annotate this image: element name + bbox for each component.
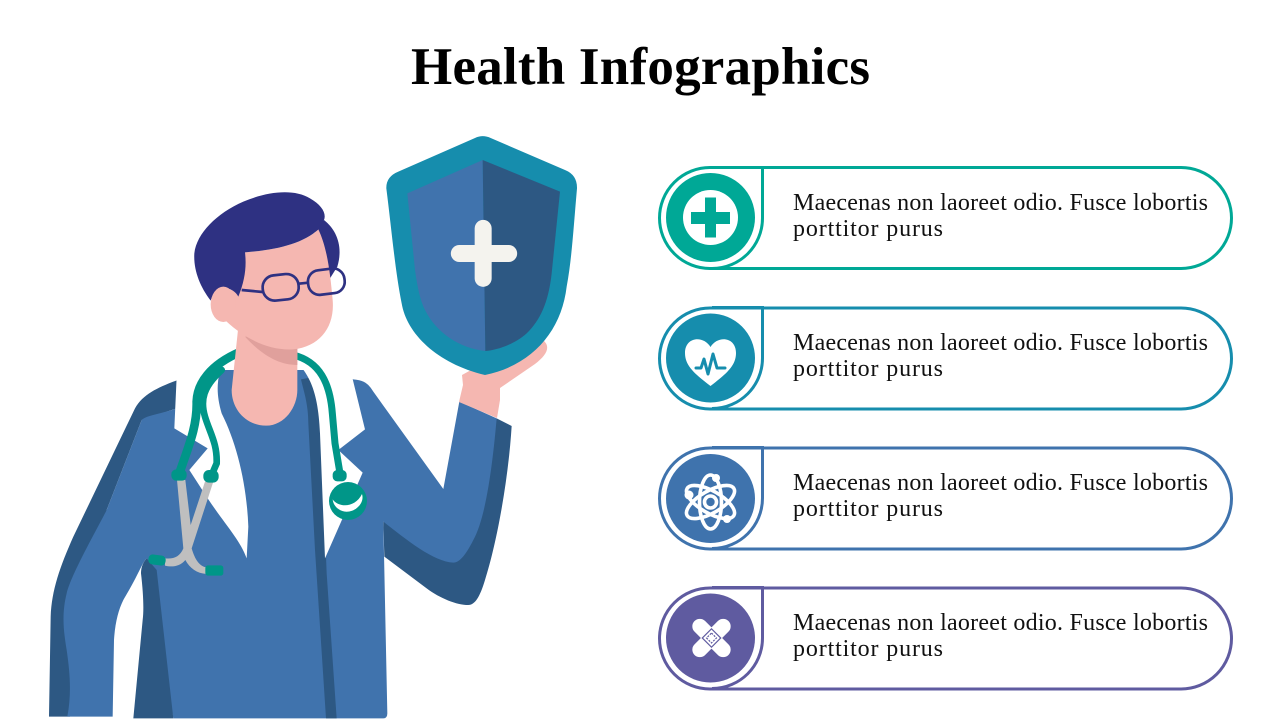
title: Health Infographics xyxy=(411,38,870,96)
row 2: heart pulse item xyxy=(660,308,1232,409)
lab coat left lapel xyxy=(174,367,248,558)
glasses xyxy=(242,267,346,302)
icon: atom xyxy=(666,454,755,543)
shield xyxy=(386,136,577,375)
shield cross xyxy=(451,220,517,287)
pill outline xyxy=(660,588,1232,689)
text block: Maecenas non laoreet odio. Fusce lobortis xyxy=(793,610,1208,636)
row 4: bandage item xyxy=(660,588,1232,689)
icon: heart pulse xyxy=(666,314,755,402)
pill outline xyxy=(660,308,1232,409)
text block: porttitor purus xyxy=(793,356,943,382)
icon: bandage xyxy=(666,594,755,682)
row 1: medical cross item xyxy=(660,168,1232,268)
text block: Maecenas non laoreet odio. Fusce lobortis xyxy=(793,330,1208,356)
hair front xyxy=(194,192,325,301)
stethoscope xyxy=(179,352,340,475)
pill outline xyxy=(660,448,1232,549)
head xyxy=(194,136,577,375)
doctor body and coat xyxy=(49,327,512,718)
text block: porttitor purus xyxy=(793,216,943,242)
illustration: doctor holding shield xyxy=(49,136,577,718)
face xyxy=(220,229,333,349)
neck xyxy=(232,327,297,426)
chest piece xyxy=(329,482,367,520)
hair back xyxy=(315,220,340,278)
hand xyxy=(459,338,547,418)
text block: Maecenas non laoreet odio. Fusce lobortis xyxy=(793,190,1208,216)
row 3: atom item xyxy=(660,448,1232,549)
ear xyxy=(211,287,236,322)
text block: porttitor purus xyxy=(793,636,943,662)
pill outline xyxy=(660,168,1232,268)
text block: porttitor purus xyxy=(793,496,943,522)
lab coat right lapel xyxy=(298,363,365,558)
icon: medical cross xyxy=(666,173,755,262)
text block: Maecenas non laoreet odio. Fusce lobortis xyxy=(793,470,1208,496)
